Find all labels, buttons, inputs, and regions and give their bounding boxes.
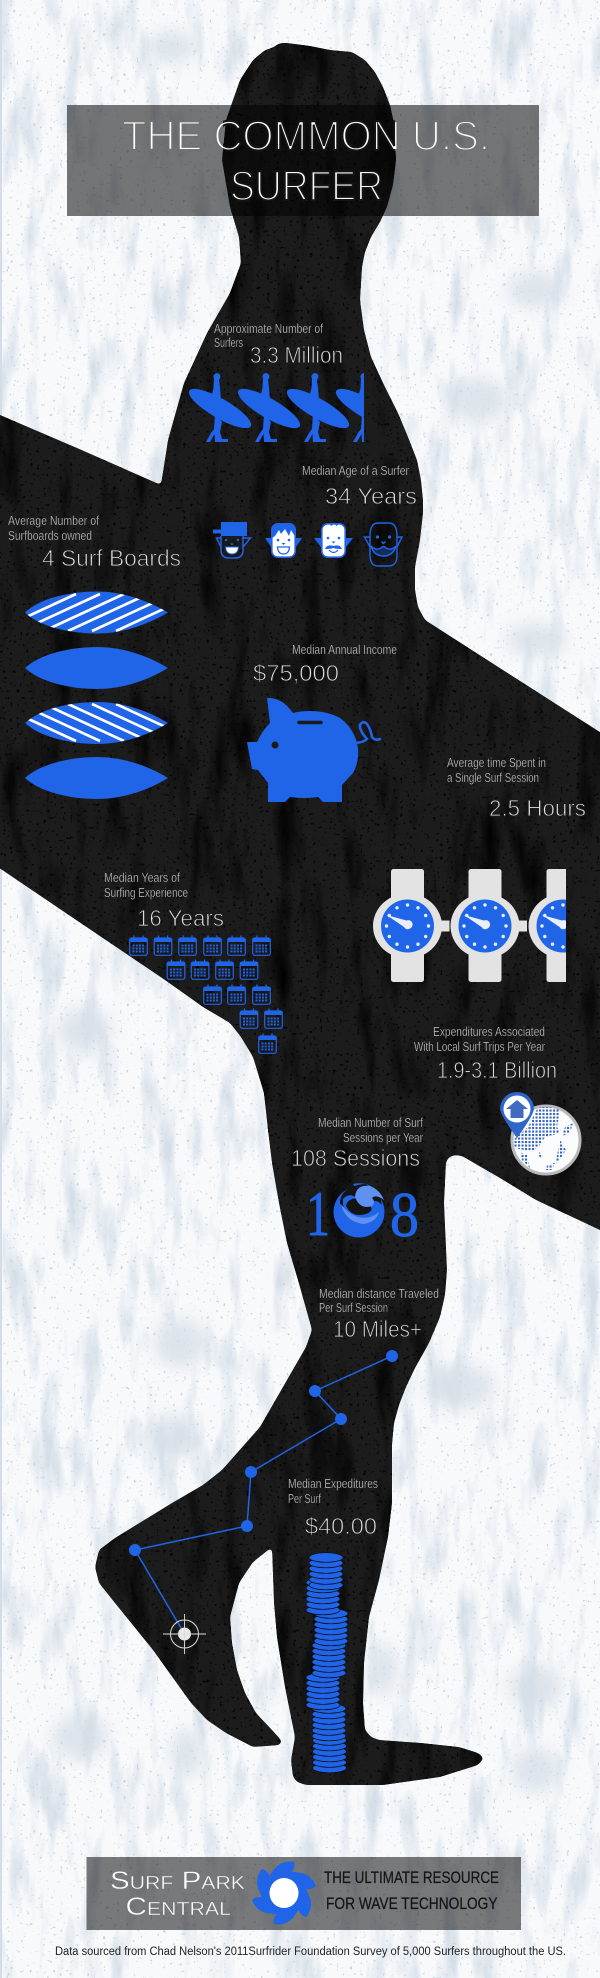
title banner: [67, 105, 539, 216]
stat: years of experience: [104, 871, 282, 1053]
icon row: surfers: [188, 373, 364, 442]
tagline line 2: FOR WAVE TECHNOLOGY: [326, 1894, 498, 1913]
title line 1: THE COMMON U.S.: [122, 112, 490, 159]
icon: globe with home pin: [500, 1092, 580, 1174]
label: Average Number of: [8, 514, 99, 528]
logo banner: [86, 1857, 521, 1930]
value: 2.5 Hours: [489, 795, 586, 821]
value: 16 Years: [137, 905, 224, 931]
icon row: watches: [373, 869, 566, 982]
face with mustache: [314, 523, 353, 557]
icon: 108 with wave: 8: [390, 1179, 419, 1250]
label line 2: Surfing Experience: [104, 886, 188, 900]
icon: piggy bank: [247, 698, 380, 802]
source note: Data sourced from Chad Nelson's 2011Surfrider Foundation Survey of 5,000 Surfers throughout the US.: [55, 1946, 566, 1958]
label: Approximate Number of: [214, 322, 323, 336]
stat: distance travelled: [129, 1287, 439, 1654]
label: Median Number of Surf: [318, 1116, 423, 1130]
brand name line 2: CENTRAL: [126, 1893, 231, 1921]
label: Median Expeditures: [288, 1477, 378, 1491]
tagline line 1: THE ULTIMATE RESOURCE: [324, 1868, 499, 1887]
stat: median age: [213, 464, 417, 566]
icon: solid board 2: [25, 647, 168, 689]
value: 4 Surf Boards: [42, 545, 181, 571]
label: Median distance Traveled: [319, 1287, 439, 1301]
stat: spend per surf: [288, 1477, 378, 1773]
icon: target: [163, 1614, 206, 1654]
label: Median Annual Income: [292, 643, 397, 657]
route line with stops: [129, 1350, 398, 1634]
label line 2: Surfers: [214, 336, 243, 350]
value: 10 Miles+: [333, 1316, 422, 1342]
icon row: faces: [213, 522, 402, 566]
icon: striped board 1: [25, 592, 168, 634]
stat: session time: [373, 756, 600, 982]
label line 2: Per Surf Session: [319, 1301, 388, 1315]
label line 2: a Single Surf Session: [447, 771, 539, 785]
icon group: calendars: [130, 936, 282, 1053]
stat: annual income: [247, 643, 397, 802]
brand name line 1: SURF PARK: [110, 1867, 245, 1895]
label line 2: Per Surf: [288, 1492, 321, 1506]
icon: striped board 3: [25, 702, 168, 744]
face with cap: [213, 522, 250, 558]
value: $40.00: [305, 1513, 377, 1539]
icon: coin stack: [306, 1553, 348, 1773]
label: Median Age of a Surfer: [302, 464, 409, 478]
face with beard: [364, 523, 402, 566]
value: 1.9-3.1 Billion: [437, 1057, 557, 1083]
label line 2: Surfboards owned: [8, 529, 92, 543]
value: $75,000: [253, 660, 339, 686]
stat: local expenditures: [414, 1025, 580, 1174]
value: 3.3 Million: [250, 342, 343, 368]
label line 2: Sessions per Year: [343, 1131, 423, 1145]
label: Average time Spent in: [447, 756, 546, 770]
label: Median Years of: [104, 871, 180, 885]
label line 2: With Local Surf Trips Per Year: [414, 1040, 545, 1054]
icon: 108 with wave: 1: [306, 1178, 330, 1249]
stat: surf boards owned: [8, 516, 180, 799]
title line 2: SURFER: [230, 162, 383, 209]
face with spiky hair: [265, 523, 302, 557]
stat: number of surfers: [188, 324, 364, 442]
stat: sessions per year: [291, 1116, 423, 1250]
label: Expenditures Associated: [433, 1025, 545, 1039]
icon: solid board 4: [25, 757, 168, 799]
icon: swirl logo: [247, 1861, 321, 1925]
value: 108 Sessions: [291, 1145, 420, 1171]
value: 34 Years: [325, 483, 417, 509]
icon: 108 with wave: [306, 1178, 419, 1250]
